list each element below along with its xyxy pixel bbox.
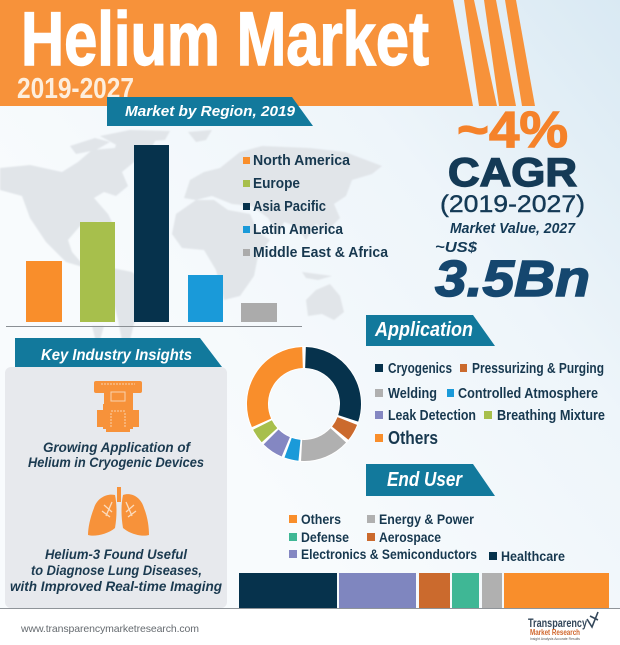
insight text 2: with Improved Real-time Imaging	[10, 578, 222, 594]
legend: end users: Healthcare	[501, 548, 565, 564]
stat: market value: 3.5Bn	[435, 250, 590, 307]
bar chart	[6, 145, 302, 327]
banner: stripes	[464, 0, 497, 106]
legend: end users: Defense	[301, 529, 349, 545]
subtitle years: 2019-2027	[17, 73, 134, 105]
legend: regions: Latin America	[253, 222, 344, 238]
legend: end users: Others	[301, 511, 341, 527]
panel: end user	[239, 464, 609, 608]
legend: applications: Others	[388, 428, 438, 448]
insight text 1: Growing Application of	[43, 439, 191, 455]
logo	[528, 612, 598, 641]
insight text 2: to Diagnose Lung Diseases,	[31, 562, 202, 578]
stat: market value label: Market Value, 2027	[450, 220, 576, 237]
legend: end users: Electronics & Semiconductors	[301, 546, 477, 562]
legend: regions	[243, 153, 389, 261]
logo: tagline: Insight Analysis Accurate Results	[530, 637, 580, 641]
footer band	[0, 608, 620, 645]
legend: end users	[289, 511, 565, 564]
legend: regions: Europe	[253, 176, 300, 192]
footer website: www.transparencymarketresearch.com	[20, 623, 199, 635]
legend: regions: Middle East & Africa	[253, 245, 389, 261]
stacked bar	[239, 573, 609, 608]
donut chart	[257, 358, 350, 450]
legend: applications: Leak Detection	[388, 408, 476, 424]
footer rule	[0, 608, 620, 609]
banner: orange panel	[0, 0, 473, 106]
insight text 2: Helium-3 Found Useful	[45, 546, 188, 562]
legend: applications: Welding	[388, 386, 437, 402]
heading ribbon	[15, 338, 222, 367]
legend: applications: Controlled Atmosphere	[458, 386, 598, 402]
icon: cryogenic device	[94, 381, 142, 432]
stat: CAGR period: (2019-2027)	[440, 191, 585, 218]
legend: end users: Aerospace	[379, 529, 441, 545]
stat: currency: ~US$	[435, 239, 478, 256]
legend: regions: North America	[253, 153, 351, 169]
stat: CAGR percent: ~4%	[457, 101, 568, 158]
heading ribbon	[366, 464, 495, 496]
panel: CAGR and market value	[435, 101, 590, 307]
legend: applications: Cryogenics	[388, 361, 452, 377]
heading ribbon	[366, 315, 495, 346]
panel: key industry insights	[5, 338, 227, 608]
legend: applications	[375, 361, 605, 448]
icon: lungs	[88, 487, 149, 536]
logo: check mark	[587, 612, 598, 627]
legend: end users: Energy & Power	[379, 511, 474, 527]
panel: application	[257, 315, 605, 450]
legend: regions: Asia Pacific	[253, 199, 326, 215]
heading: Application	[374, 319, 473, 341]
heading: End User	[387, 469, 463, 491]
insights background	[5, 367, 227, 608]
top banner	[0, 0, 535, 106]
legend: applications: Breathing Mixture	[497, 408, 605, 424]
insight text 1: Helium in Cryogenic Devices	[28, 454, 204, 470]
world map	[0, 130, 382, 346]
panel: market by region	[6, 97, 389, 327]
logo: name: Transparency	[528, 616, 587, 630]
heading: Market by Region, 2019	[125, 103, 296, 120]
logo: market research: Market Research	[530, 628, 580, 637]
heading: Key Industry Insights	[41, 347, 192, 364]
stat: CAGR label: CAGR	[448, 151, 577, 195]
heading ribbon	[107, 97, 313, 126]
